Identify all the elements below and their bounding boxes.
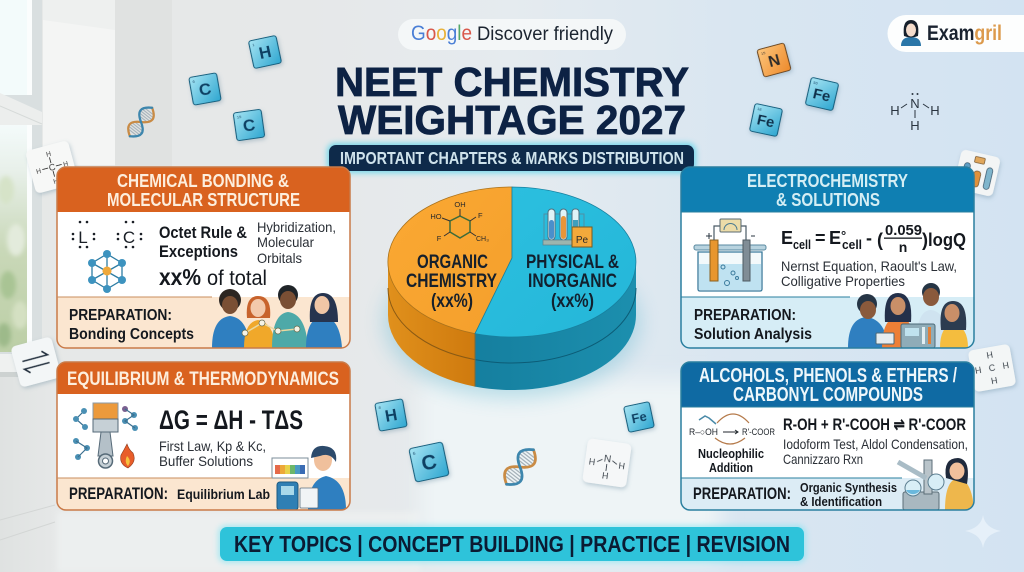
element tile: N: N bbox=[767, 52, 782, 71]
preparation text: Solution Analysis bbox=[694, 326, 812, 343]
icon: organic molecule: F bbox=[437, 234, 442, 243]
octet text: Octet Rule & bbox=[159, 223, 247, 242]
google discover pill: Google bbox=[411, 22, 472, 45]
sparkle star bbox=[965, 515, 1001, 548]
share of total: of total bbox=[207, 267, 267, 290]
title bbox=[335, 59, 689, 143]
panel: alcohols phenols ethers carbonyl bbox=[681, 362, 974, 510]
organic label: (xx%) bbox=[431, 291, 473, 312]
preparation text: PREPARATION: bbox=[69, 484, 168, 503]
preparation text bbox=[69, 307, 194, 343]
octet text bbox=[159, 223, 247, 261]
preparation text bbox=[693, 480, 897, 509]
preparation text: PREPARATION: bbox=[69, 307, 172, 324]
card: equilibrium arrows bbox=[10, 336, 62, 388]
card: methane structure: H bbox=[36, 168, 42, 176]
nernst equation bbox=[781, 223, 966, 255]
ammonia formula: H bbox=[930, 103, 940, 118]
panel heading bbox=[107, 170, 300, 210]
ammonia formula bbox=[890, 93, 940, 133]
icon: dna bottom bbox=[499, 444, 541, 490]
card: methane structure bbox=[25, 140, 79, 194]
element tile: Fe bottom: Fe bbox=[630, 409, 648, 426]
icon: electrochemical cell bbox=[694, 219, 766, 291]
nernst equation: ( bbox=[877, 230, 883, 250]
mechanism diagram: R–○OH bbox=[689, 427, 718, 437]
card: ammonia: H bbox=[588, 456, 596, 467]
card: methane structure: H bbox=[45, 151, 52, 159]
preparation text: & Identification bbox=[800, 494, 882, 509]
element tile: Fe lower: Fe bbox=[755, 111, 776, 132]
student with pH meter bbox=[272, 446, 346, 510]
nernst equation: cell bbox=[842, 238, 862, 252]
card: methane structure: H bbox=[63, 161, 69, 169]
card: ammonia: H bbox=[601, 470, 609, 481]
element tile: H lower: H bbox=[383, 405, 399, 426]
lewis dot symbols: L bbox=[78, 228, 88, 247]
nernst equation: ) bbox=[922, 230, 928, 250]
element tile: C lower: C bbox=[242, 115, 256, 136]
reaction list: Cannizzaro Rxn bbox=[783, 451, 863, 467]
panel heading bbox=[747, 170, 909, 210]
card: methane right: H bbox=[974, 365, 982, 376]
panel heading: MOLECULAR STRUCTURE bbox=[107, 189, 300, 210]
nernst equation: n bbox=[899, 239, 907, 255]
lewis dot symbols: C bbox=[123, 228, 135, 247]
element tile: C: 6 bbox=[192, 79, 196, 84]
nernst notes bbox=[781, 258, 957, 289]
hybridization text: Orbitals bbox=[257, 250, 302, 266]
panel heading: CHEMICAL BONDING & bbox=[117, 170, 289, 191]
panel: equilibrium and thermodynamics bbox=[57, 362, 350, 510]
element tile: H lower: 8 bbox=[378, 405, 382, 410]
physical and inorganic slice bbox=[475, 187, 636, 337]
ammonia formula: H bbox=[890, 103, 900, 118]
organic label: ORGANIC bbox=[417, 252, 488, 273]
physical label: INORGANIC bbox=[528, 271, 617, 292]
element tile: Fe lower: 18 bbox=[757, 106, 763, 112]
element tile: C bottom: C bbox=[419, 450, 439, 476]
share of total bbox=[159, 264, 267, 290]
card: methane right: H bbox=[986, 350, 994, 361]
element tile: C lower bbox=[233, 109, 265, 141]
nernst equation: 0.059 bbox=[885, 223, 922, 239]
card: ammonia bbox=[582, 438, 632, 488]
nernst notes: Colligative Properties bbox=[781, 273, 905, 289]
card: methane structure: C bbox=[48, 162, 57, 173]
panel heading: EQUILIBRIUM & THERMODYNAMICS bbox=[67, 369, 339, 390]
subtitle banner bbox=[327, 143, 696, 173]
organic label bbox=[406, 252, 497, 312]
preparation text: Bonding Concepts bbox=[69, 326, 194, 343]
panel heading: & SOLUTIONS bbox=[776, 189, 880, 210]
card: methane right bbox=[968, 344, 1016, 392]
preparation text bbox=[694, 307, 812, 343]
mechanism diagram bbox=[689, 414, 775, 444]
physical label: (xx%) bbox=[551, 291, 594, 312]
icon: organic molecule: HO bbox=[430, 212, 442, 221]
element tile: Fe bottom bbox=[624, 402, 654, 432]
logo: Examgril: Examgril bbox=[927, 22, 1002, 45]
ammonia formula: N bbox=[910, 96, 920, 111]
esterification equation: R-OH + R'-COOH ⇌ R'-COOR bbox=[783, 415, 966, 434]
share of total: xx% bbox=[159, 264, 201, 290]
element tile: C lower: 15 bbox=[236, 114, 242, 120]
icon: molecular lattice bbox=[88, 250, 126, 293]
panel: chemical bonding bbox=[57, 167, 350, 348]
card: ammonia: H bbox=[618, 461, 626, 471]
bottom banner bbox=[218, 525, 806, 563]
icon: dna left bbox=[124, 103, 158, 141]
element tile: Fe upper: Fe bbox=[811, 85, 832, 106]
google discover pill: Discover friendly bbox=[477, 24, 613, 45]
icon: woman avatar bbox=[901, 20, 921, 46]
element tile: C bottom: 6 bbox=[412, 451, 416, 456]
title: WEIGHTAGE 2027 bbox=[338, 97, 686, 143]
icon: piston and flame bbox=[73, 403, 138, 468]
icon: organic molecule bbox=[430, 200, 489, 243]
nernst equation: E bbox=[829, 228, 841, 248]
element tile: Fe upper: 50 bbox=[813, 80, 819, 86]
panel heading: CARBONYL COMPOUNDS bbox=[733, 384, 923, 406]
bottom banner: KEY TOPICS | CONCEPT BUILDING | PRACTICE | REVISION bbox=[234, 531, 790, 557]
reaction list: Iodoform Test, Aldol Condensation, bbox=[783, 436, 968, 452]
icon: organic molecule: OH bbox=[454, 200, 466, 209]
element tile: N bbox=[757, 43, 791, 77]
organic slice bbox=[388, 187, 512, 334]
organic label: CHEMISTRY bbox=[406, 271, 497, 292]
nernst equation: = bbox=[815, 228, 826, 248]
mechanism label bbox=[698, 447, 764, 475]
element tile: H: H bbox=[257, 42, 273, 63]
law list bbox=[159, 438, 266, 469]
element tile: C bbox=[189, 73, 221, 105]
mechanism label: Nucleophilic bbox=[698, 447, 764, 461]
pie chart: chemistry split bbox=[384, 187, 640, 398]
preparation text: Equilibrium Lab bbox=[177, 486, 270, 502]
element tile: N: 15 bbox=[760, 50, 767, 56]
icon: organic molecule: F bbox=[478, 211, 483, 220]
panel heading: ELECTROCHEMISTRY bbox=[747, 170, 909, 191]
panel heading bbox=[699, 365, 957, 406]
nernst equation: logQ bbox=[928, 230, 966, 250]
ammonia formula: H bbox=[910, 118, 920, 133]
element tile: Fe lower bbox=[749, 103, 783, 137]
nernst equation: - bbox=[866, 228, 872, 248]
element tile: C: C bbox=[197, 79, 213, 100]
preparation text: Organic Synthesis bbox=[800, 480, 897, 495]
element tile: C bottom bbox=[409, 442, 449, 482]
law list: Buffer Solutions bbox=[159, 453, 253, 469]
hybridization text: Molecular bbox=[257, 234, 314, 250]
preparation text: PREPARATION: bbox=[694, 307, 796, 324]
card: ammonia: N bbox=[603, 454, 612, 465]
mechanism diagram: R'-COOR bbox=[742, 427, 775, 437]
mechanism label: Addition bbox=[709, 461, 753, 475]
google discover pill bbox=[398, 19, 626, 50]
nernst equation: cell bbox=[793, 238, 811, 252]
window bbox=[0, 0, 44, 377]
panel: electrochemistry and solutions bbox=[681, 167, 974, 348]
card: test tubes bbox=[953, 149, 1001, 197]
octet text: Exceptions bbox=[159, 242, 238, 261]
gibbs equation: ΔG = ΔH - TΔS bbox=[159, 405, 303, 435]
icon: test tubes with Pe tile: Pe bbox=[576, 235, 589, 246]
element tile: H lower bbox=[375, 399, 407, 431]
reaction list bbox=[783, 436, 968, 467]
hybridization text: Hybridization, bbox=[257, 219, 336, 235]
people with molecule model bbox=[212, 285, 342, 348]
physical label: PHYSICAL & bbox=[526, 252, 619, 273]
icon: test tubes with Pe tile bbox=[543, 209, 592, 247]
preparation text: PREPARATION: bbox=[693, 484, 791, 503]
nernst equation: E bbox=[781, 228, 793, 248]
card: methane right: H bbox=[1002, 360, 1010, 371]
physical label bbox=[526, 252, 619, 312]
logo: Examgril bbox=[888, 15, 1024, 52]
element tile: H: 1 bbox=[252, 42, 256, 47]
hybridization text bbox=[257, 219, 336, 266]
nernst equation: ° bbox=[841, 228, 846, 243]
element tile: H bbox=[248, 35, 282, 69]
lewis dot symbols bbox=[72, 221, 142, 248]
title: NEET CHEMISTRY bbox=[335, 59, 689, 105]
chemist with distillation apparatus bbox=[898, 458, 974, 510]
card: methane structure: H bbox=[53, 178, 59, 186]
card: methane right: C bbox=[988, 362, 997, 373]
icon: organic molecule: CH₃ bbox=[476, 236, 489, 243]
nernst notes: Nernst Equation, Raoult's Law, bbox=[781, 258, 957, 274]
students with lab device bbox=[848, 283, 968, 348]
element tile: Fe upper bbox=[805, 77, 839, 111]
preparation text bbox=[69, 484, 270, 503]
card: methane right: H bbox=[990, 375, 998, 386]
subtitle banner: IMPORTANT CHAPTERS & MARKS DISTRIBUTION bbox=[340, 148, 684, 168]
law list: First Law, Kp & Kc, bbox=[159, 438, 266, 454]
